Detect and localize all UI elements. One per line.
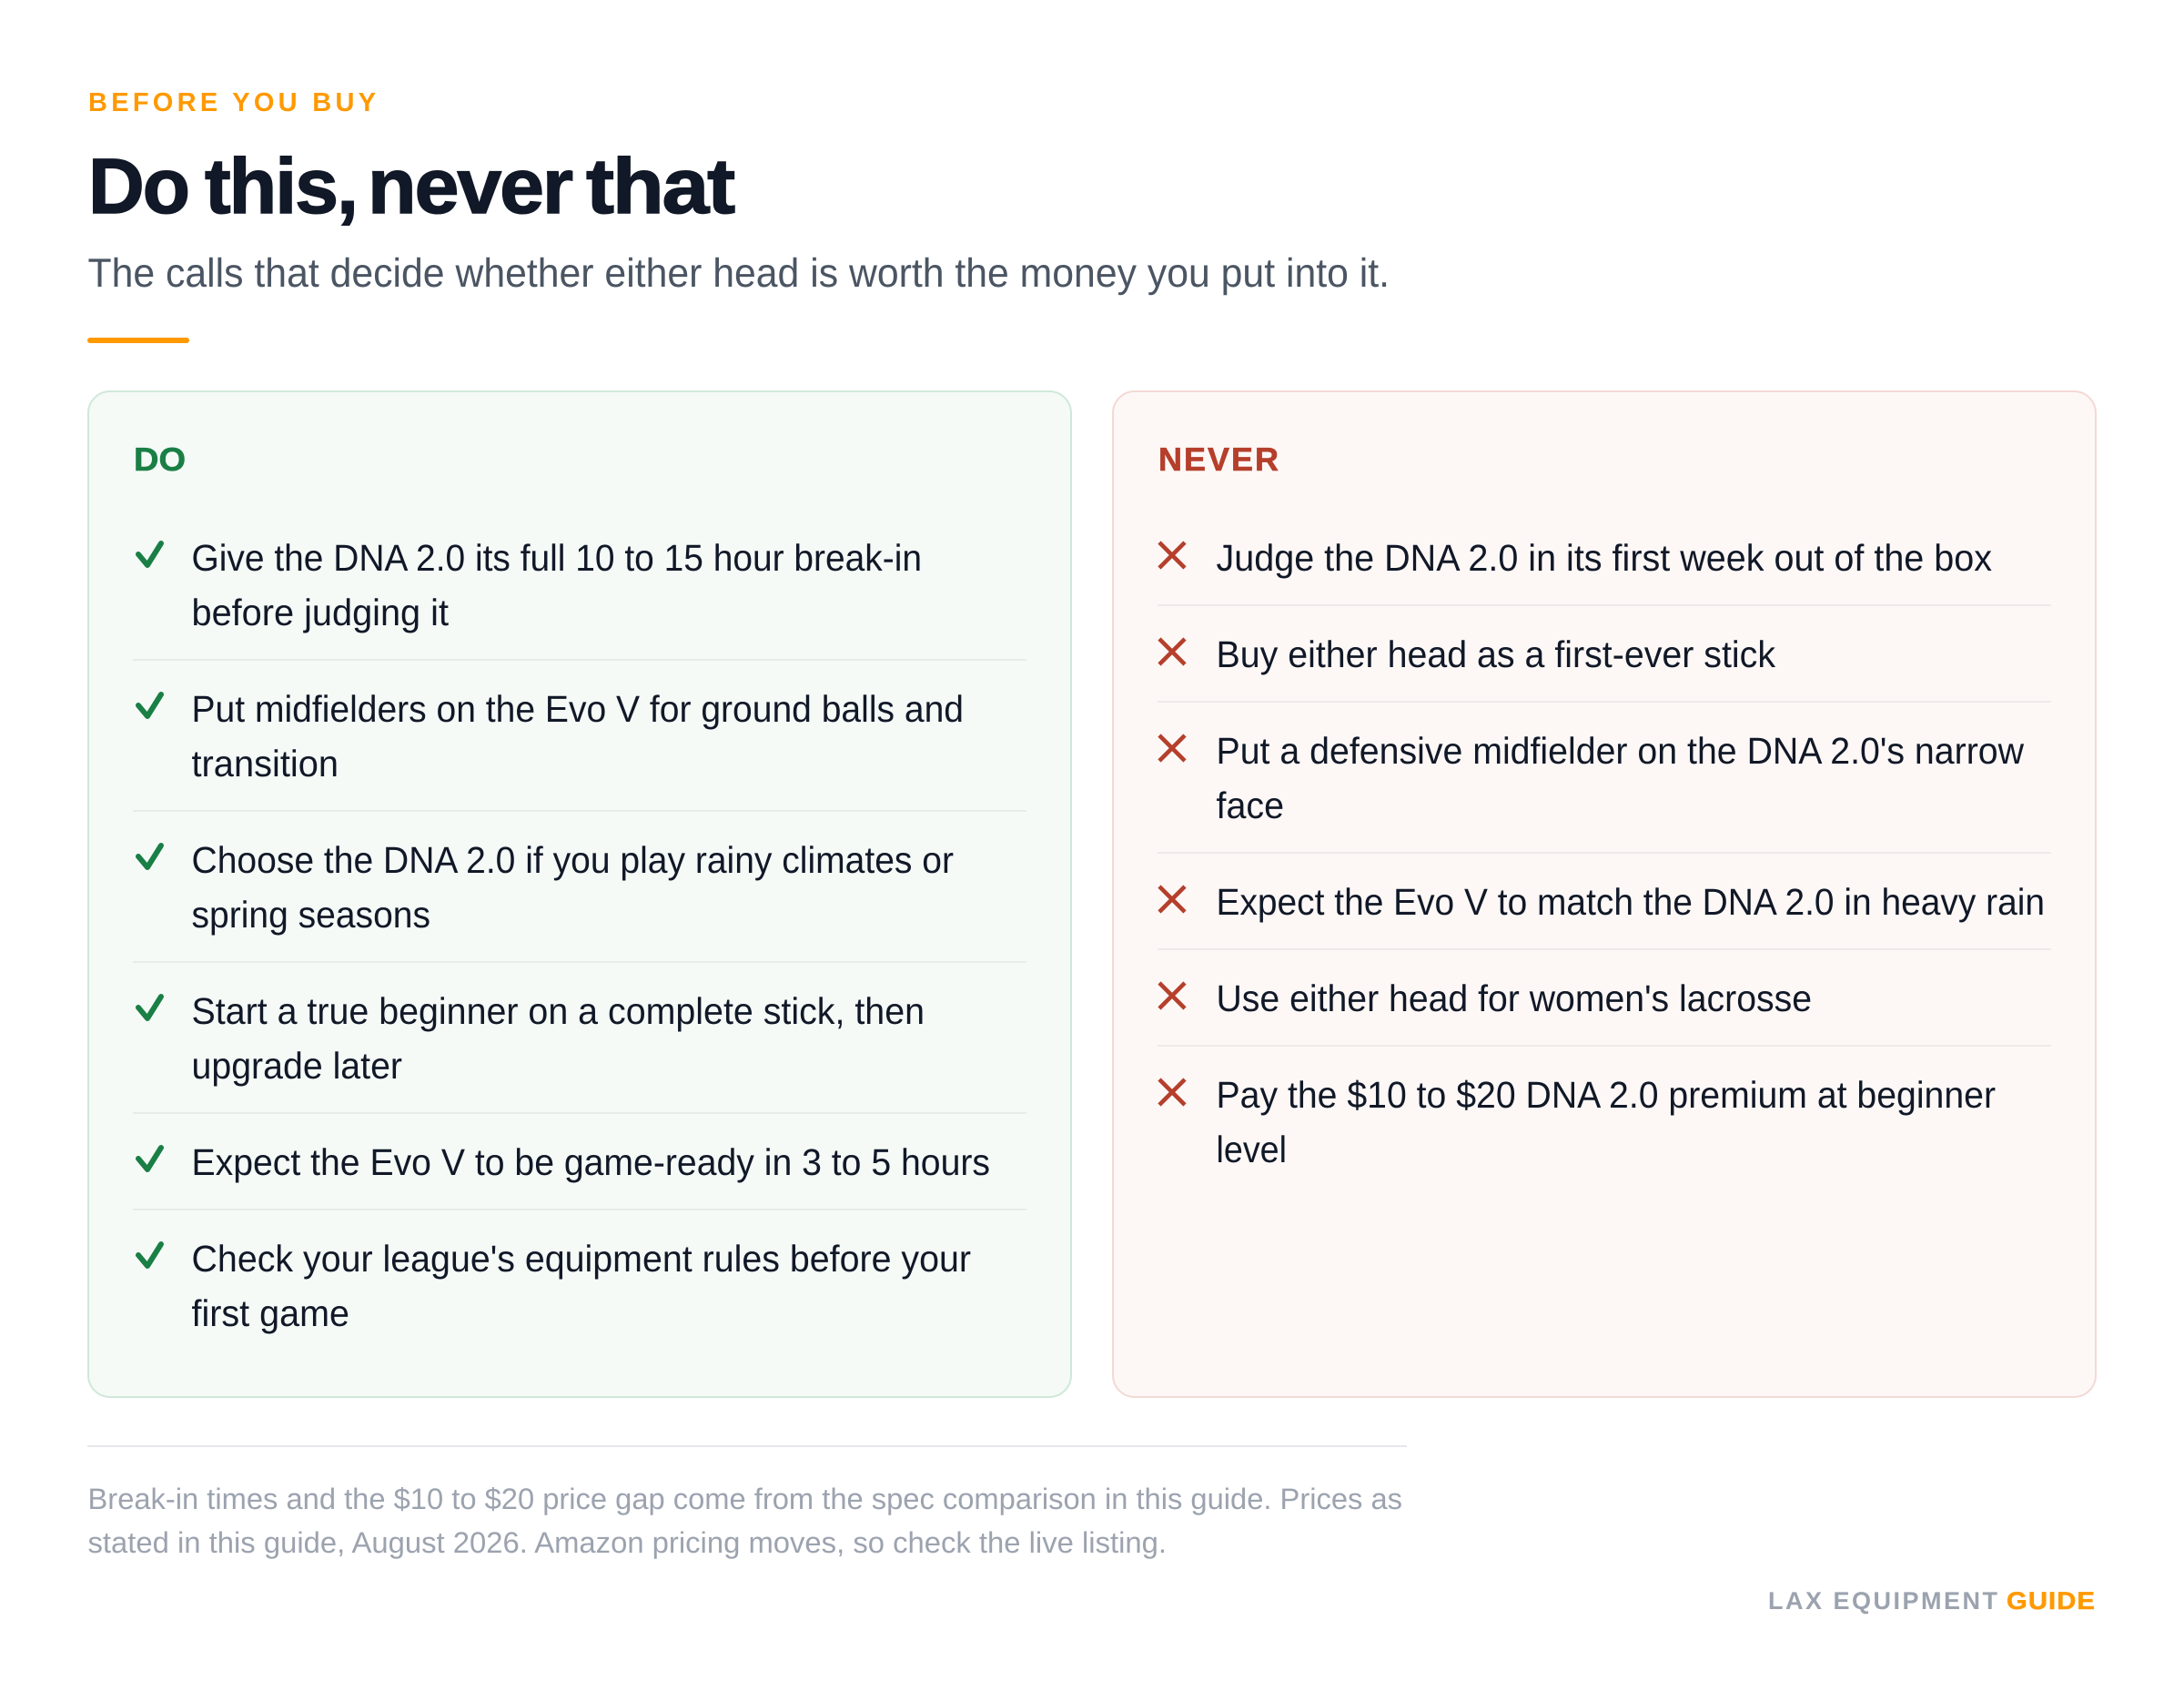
do item 2: transition — [191, 743, 339, 785]
never item 6 — [1159, 1074, 1996, 1170]
icon: check — [138, 694, 161, 716]
brand mark: GUIDE — [2007, 1587, 2096, 1615]
icon: check — [138, 997, 161, 1018]
do item 6 — [138, 1238, 971, 1334]
title: Do — [88, 143, 188, 230]
do item 5 — [138, 1141, 990, 1183]
icon: check — [138, 543, 161, 565]
item text: Choose the DNA 2.0 if you play rainy climates or — [191, 839, 954, 881]
never heading: NEVER — [1158, 440, 1279, 478]
title: never — [368, 143, 573, 230]
do item 1 — [138, 537, 922, 633]
icon: cross — [1159, 639, 1185, 664]
do item 4 — [138, 990, 925, 1087]
item text: Put a defensive midfielder on the DNA 2.0's narrow — [1216, 730, 2024, 772]
never item 5 — [1159, 977, 1812, 1019]
icon: cross — [1159, 1079, 1185, 1105]
item text: Give the DNA 2.0 its full 10 to 15 hour break-in — [191, 537, 922, 579]
header — [87, 88, 1390, 343]
item text: Use either head for women's lacrosse — [1216, 977, 1812, 1019]
item text: Judge the DNA 2.0 in its first week out of the box — [1216, 537, 1992, 579]
panel: do — [88, 391, 1071, 1397]
do item 1: before judging it — [191, 592, 450, 633]
icon: cross — [1159, 886, 1185, 912]
item text: Buy either head as a first-ever stick — [1216, 633, 1775, 675]
icon: check — [138, 1148, 161, 1170]
panel background — [88, 391, 1071, 1397]
panel background — [1113, 391, 2096, 1397]
never item 1 — [1159, 537, 1992, 579]
icon: cross — [1159, 735, 1185, 761]
item text: Pay the $10 to $20 DNA 2.0 premium at beginner — [1216, 1074, 1996, 1116]
do heading: DO — [134, 440, 186, 478]
title — [88, 143, 734, 230]
footnote: stated in this guide, August 2026. Amazon pricing moves, so check the live listing. — [87, 1526, 1167, 1559]
subtitle: The calls that decide whether either head is worth the money you put into it. — [87, 251, 1390, 296]
item text: Start a true beginner on a complete stick, then — [191, 990, 925, 1032]
never item 4 — [1159, 881, 2045, 923]
item text: Expect the Evo V to be game-ready in 3 to 5 hours — [191, 1141, 990, 1183]
icon: check — [138, 1244, 161, 1266]
accent rule — [87, 338, 189, 343]
title: that — [586, 143, 734, 230]
do item 3: spring seasons — [191, 894, 430, 936]
icon: cross — [1159, 542, 1185, 568]
never item 3 — [1159, 730, 2024, 826]
item text: Expect the Evo V to match the DNA 2.0 in heavy rain — [1216, 881, 2045, 923]
do item 4: upgrade later — [191, 1045, 402, 1087]
do item 6: first game — [191, 1292, 349, 1334]
do item 3 — [138, 839, 954, 936]
panel: never — [1113, 391, 2096, 1397]
eyebrow: BEFORE YOU BUY — [88, 88, 376, 117]
do item 2 — [138, 688, 964, 785]
footnote: Break-in times and the $10 to $20 price gap come from the spec comparison in this guide. Prices as — [87, 1483, 1402, 1515]
brand mark: LAX EQUIPMENT — [1768, 1587, 1998, 1615]
never item 3: face — [1216, 785, 1284, 826]
icon: check — [138, 846, 161, 867]
never item 2 — [1159, 633, 1775, 675]
title: this, — [205, 143, 357, 230]
item text: Check your league's equipment rules before your — [191, 1238, 971, 1280]
item text: Put midfielders on the Evo V for ground balls and — [191, 688, 964, 730]
footnote — [87, 1445, 1407, 1559]
never item 6: level — [1216, 1129, 1287, 1170]
icon: cross — [1159, 983, 1185, 1008]
